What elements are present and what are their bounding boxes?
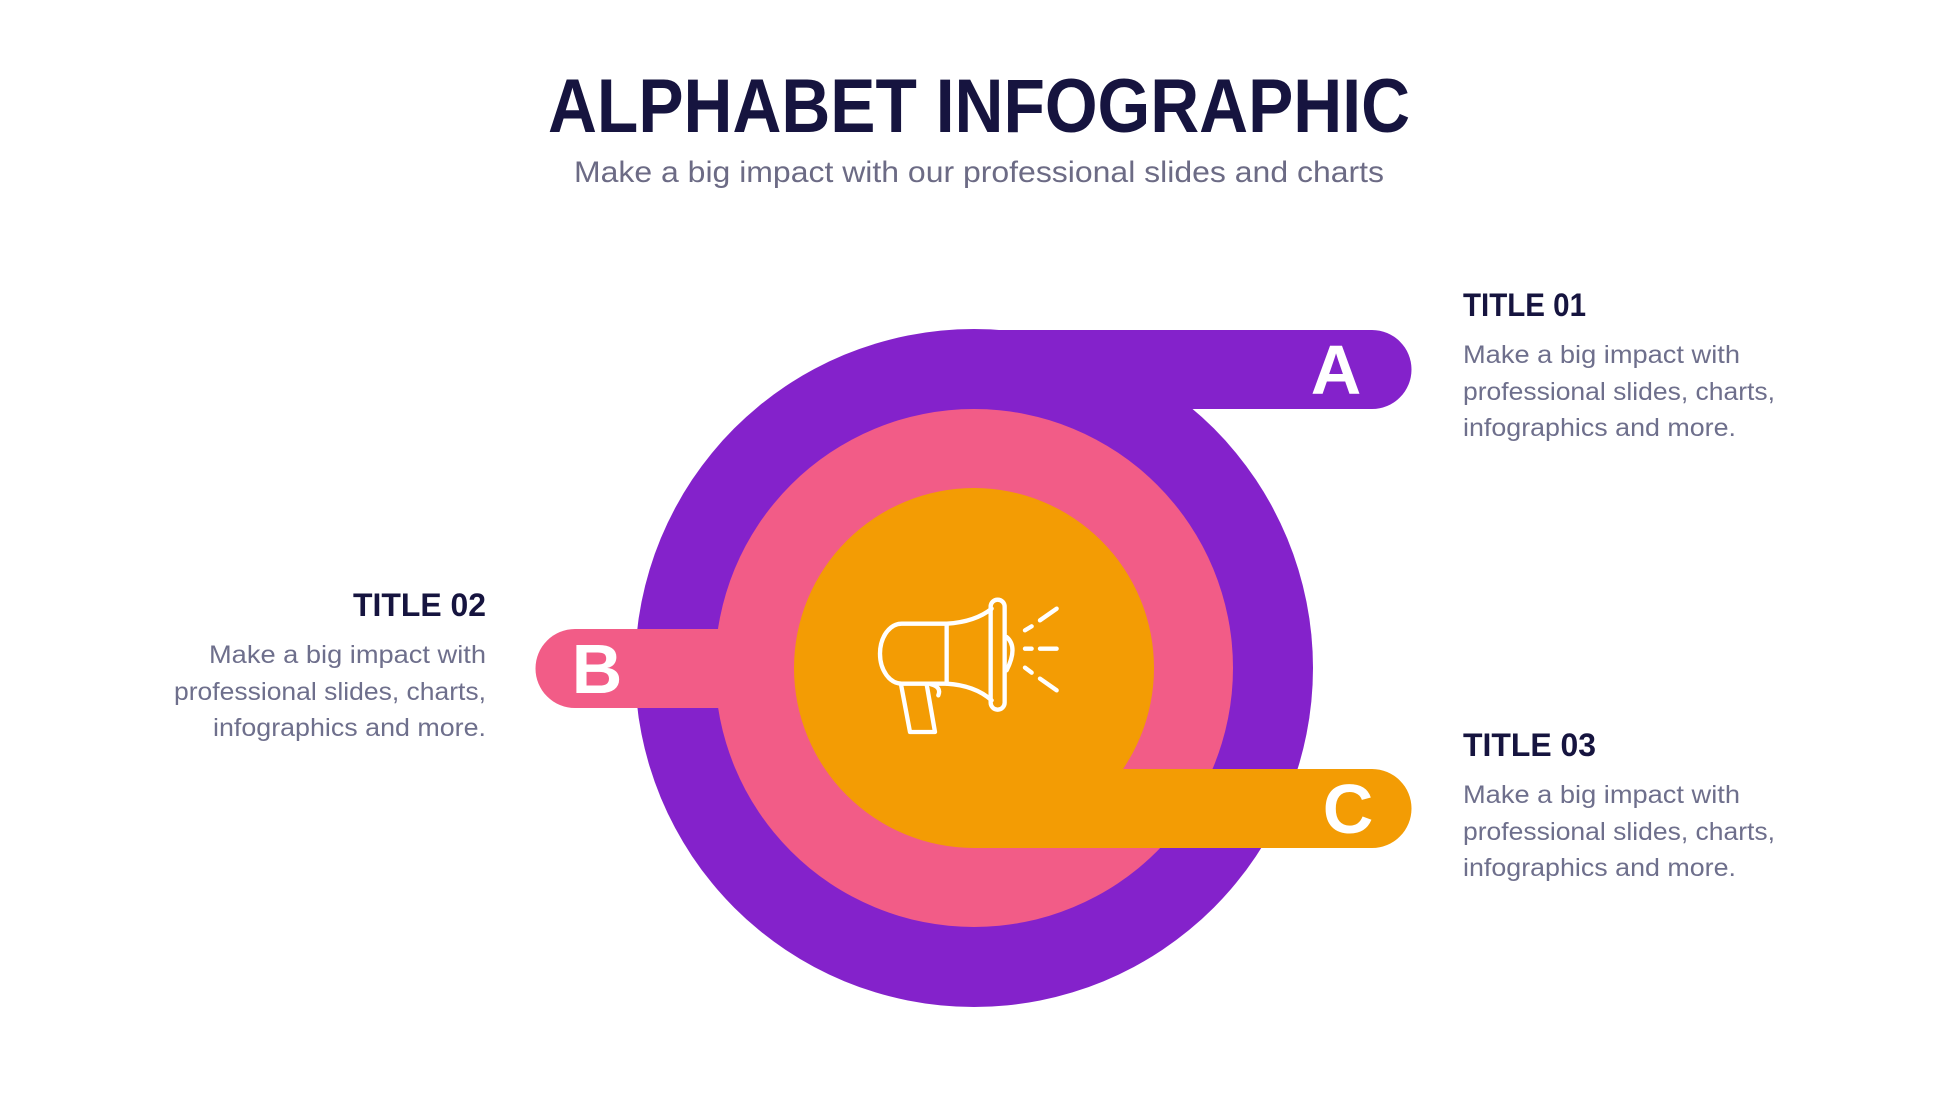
ring C orange — [794, 488, 1412, 848]
text block: title 01: professional slides, charts, — [1463, 378, 1775, 406]
text block: title 01 — [1463, 287, 1775, 442]
ring A purple — [635, 329, 1412, 1007]
letter B: B — [572, 630, 622, 708]
text block: title 02: infographics and more. — [213, 714, 486, 742]
text block: title 03: Make a big impact with — [1463, 781, 1740, 809]
text block: title 03: infographics and more. — [1463, 854, 1736, 882]
letter C: C — [1323, 770, 1373, 848]
text block: title 03: TITLE 03 — [1463, 727, 1596, 763]
text block: title 03: professional slides, charts, — [1463, 818, 1775, 846]
icon: megaphone — [880, 600, 1057, 732]
letter A: A — [1311, 331, 1361, 409]
ring B pink — [536, 409, 1233, 927]
text block: title 02: Make a big impact with — [209, 641, 486, 669]
text block: title 01: Make a big impact with — [1463, 341, 1740, 369]
text block: title 03 — [1463, 727, 1775, 882]
diagram: concentric rings — [536, 329, 1412, 1007]
text block: title 01: infographics and more. — [1463, 414, 1736, 442]
title: ALPHABET INFOGRAPHIC — [548, 64, 1410, 149]
text block: title 02: professional slides, charts, — [174, 678, 486, 706]
text block: title 02 — [174, 587, 486, 742]
subtitle: Make a big impact with our professional slides and charts — [574, 156, 1384, 189]
text block: title 02: TITLE 02 — [353, 587, 486, 623]
text block: title 01: TITLE 01 — [1463, 287, 1586, 323]
